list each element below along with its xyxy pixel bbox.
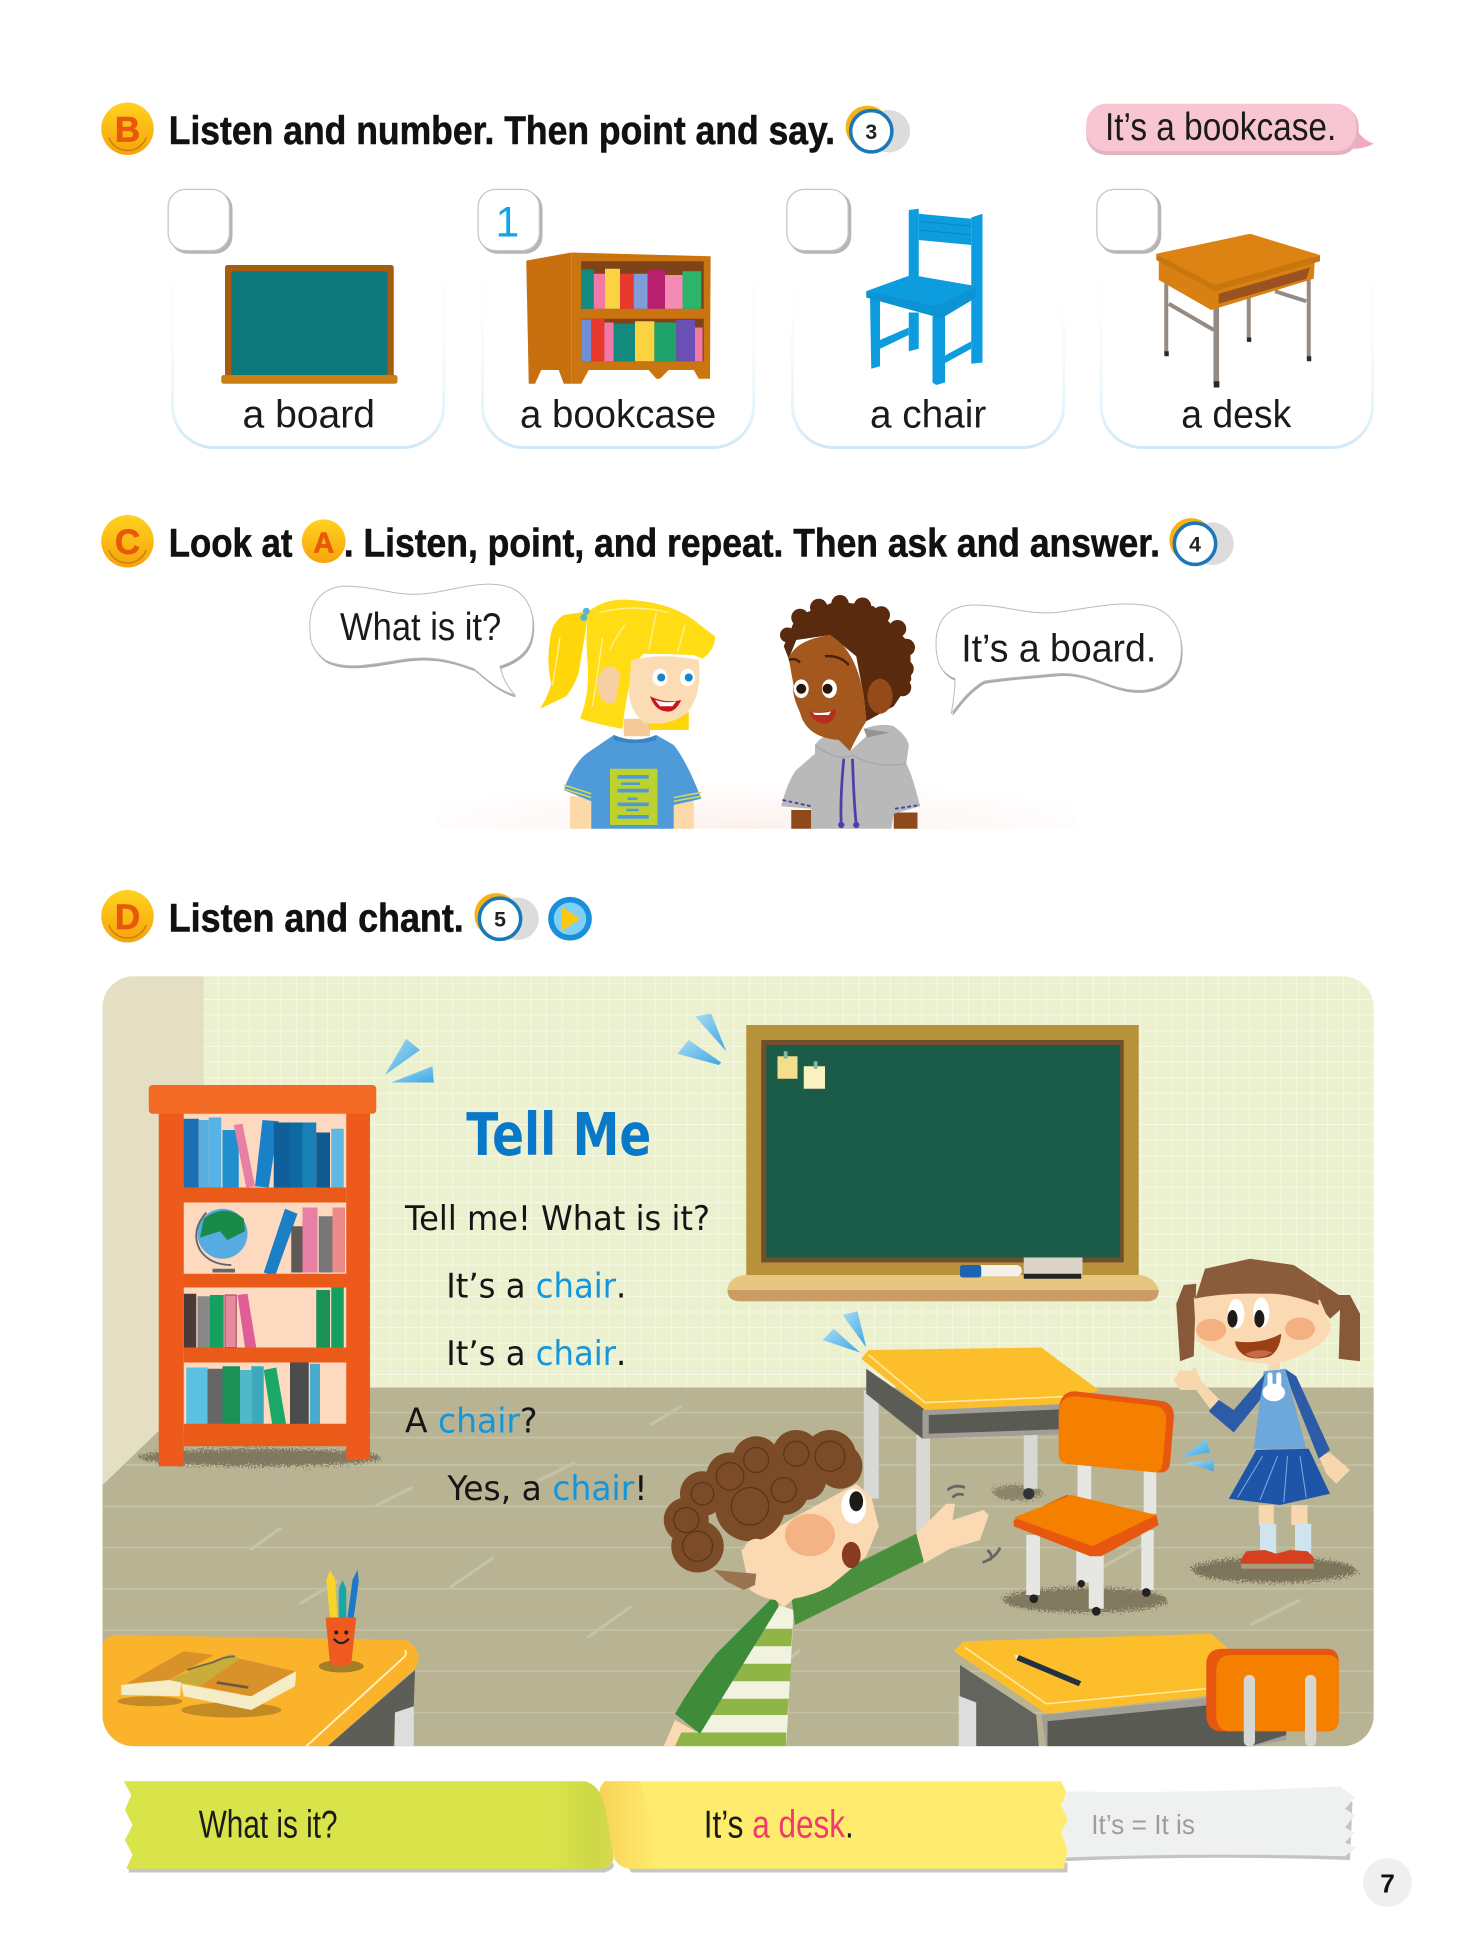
label: a desk [1181, 394, 1292, 437]
ground glow [438, 750, 1075, 829]
section C [101, 515, 1234, 829]
wall [102, 976, 1374, 1401]
orange chair [948, 1391, 1174, 1616]
label: a bookcase [520, 394, 716, 437]
language tape [124, 1781, 1356, 1872]
badge D: D [115, 898, 140, 937]
heading C: A [313, 528, 334, 560]
chant lyrics: A chair? [405, 1402, 537, 1441]
speech bubble: it's a board: It’s a board. [961, 627, 1156, 670]
badge B: B [115, 110, 140, 149]
character: blonde girl [540, 600, 715, 829]
heading C: . Listen, point, and repeat. Then ask and answer. [344, 521, 1160, 565]
yellow tape: It’s a desk. [704, 1804, 854, 1847]
audio icon 3 [846, 106, 910, 153]
boy character reaching [664, 1430, 989, 1746]
audio icon 3: 3 [865, 120, 877, 144]
chant lyrics: It’s a chair. [446, 1334, 626, 1373]
chant lyrics: Tell me! What is it? [404, 1199, 710, 1238]
speech bubble: it's a board [936, 604, 1183, 716]
heading C: Look at [169, 521, 292, 565]
audio icon 4 [1169, 518, 1234, 565]
front left desk [102, 1570, 419, 1746]
bookcase shadow [139, 1449, 381, 1466]
left wall [102, 976, 204, 1485]
audio icon 5: 5 [494, 907, 506, 931]
card: a bookcase [478, 189, 754, 448]
badge B [101, 103, 154, 155]
green tape: What is it? [199, 1804, 337, 1847]
icon: play button [548, 897, 592, 941]
number box: 1 [496, 199, 519, 246]
pencil [1015, 1655, 1081, 1686]
chant lyrics [404, 1199, 710, 1508]
page number: 7 [1380, 1869, 1395, 1899]
note tape [1062, 1786, 1356, 1861]
number box [168, 189, 232, 254]
section B [101, 103, 1374, 448]
accent marks [385, 1014, 1214, 1471]
chant lyrics: Yes, a chair! [447, 1469, 647, 1508]
top row books [181, 1118, 344, 1188]
second row: globe and books [196, 1208, 345, 1276]
card: a board [168, 189, 444, 448]
third row books [184, 1286, 344, 1348]
heading B: Listen and number. Then point and say. [169, 109, 835, 153]
speech bubble: what is it [310, 584, 534, 698]
section D heading [101, 890, 592, 942]
icon: board [221, 265, 398, 384]
badge C: C [115, 523, 140, 562]
girl character [1174, 1259, 1360, 1582]
page number [1363, 1858, 1412, 1907]
number box [478, 189, 542, 254]
bottom row books [186, 1362, 320, 1426]
speech pill: It’s a bookcase. [1105, 106, 1336, 149]
yellow tape [599, 1781, 1068, 1872]
note tape: It’s = It is [1091, 1809, 1195, 1840]
card: a chair [787, 189, 1064, 448]
chant lyrics: It’s a chair. [446, 1267, 626, 1306]
green tape [124, 1781, 614, 1872]
label: a chair [870, 394, 986, 437]
card: a desk [1097, 189, 1372, 448]
number box [787, 189, 851, 254]
number box [1097, 189, 1161, 254]
middle desk [861, 1348, 1099, 1534]
front right desk and chair [954, 1634, 1339, 1746]
icon: desk [1156, 234, 1320, 388]
badge C [101, 515, 154, 568]
audio icon 5 [474, 893, 539, 940]
chant illustration panel [102, 976, 1374, 1746]
badge D [101, 890, 154, 942]
audio icon 4: 4 [1189, 532, 1201, 556]
floor [102, 1388, 1374, 1746]
icon: chair [866, 209, 982, 385]
pencil cup [319, 1570, 364, 1672]
icon: bookcase [526, 253, 711, 384]
book [118, 1651, 296, 1718]
red bookcase [149, 1085, 376, 1466]
character: boy in hoodie [780, 595, 920, 829]
label: a board [242, 394, 375, 437]
chant title: Tell Me [466, 1100, 651, 1169]
speech bubble: what is it: What is it? [340, 606, 501, 649]
heading D: Listen and chant. [169, 896, 464, 940]
green chalkboard [728, 1025, 1159, 1301]
